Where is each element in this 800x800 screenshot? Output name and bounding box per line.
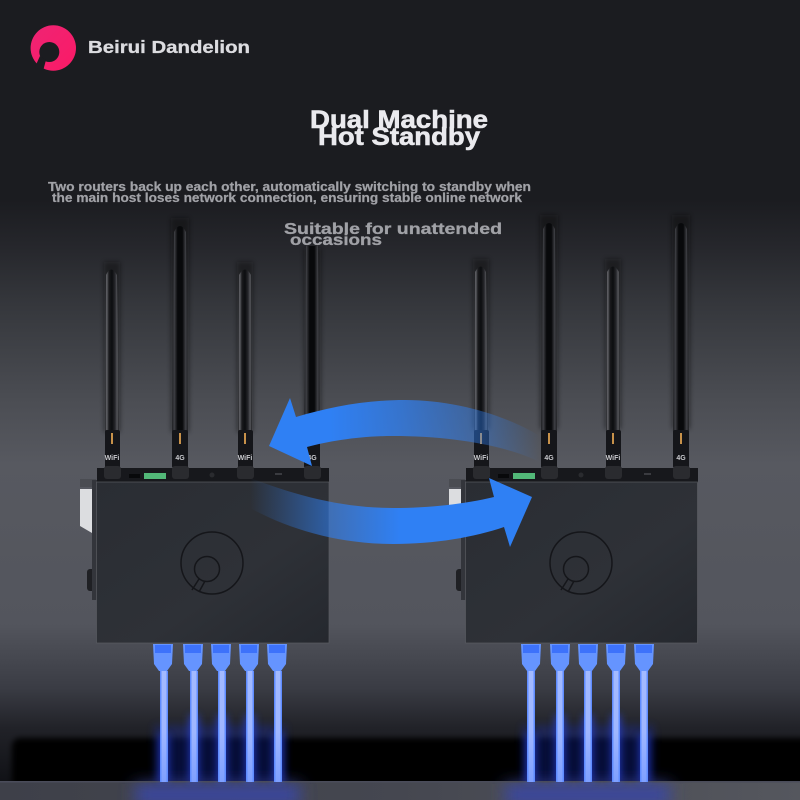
left router <box>80 218 329 782</box>
brand name: Beirui Dandelion <box>88 37 250 57</box>
right router antennas <box>474 223 689 468</box>
arrow: left router to right router <box>250 478 532 547</box>
right router antenna labels: 4G <box>544 455 554 462</box>
title <box>310 106 488 151</box>
left router bracket <box>80 479 97 600</box>
title: Hot Standby <box>318 123 480 151</box>
left router antenna labels: 4G <box>175 455 185 462</box>
left router antenna labels: WiFi <box>238 455 252 462</box>
left router antenna shadows <box>104 218 321 432</box>
description <box>48 180 531 205</box>
right router antenna labels <box>474 455 686 462</box>
floor <box>0 781 800 800</box>
left router collars <box>104 466 321 479</box>
arrow: right router to left router <box>269 398 540 466</box>
logo mark <box>31 25 76 71</box>
right router <box>449 215 698 782</box>
left router antenna labels: 4G <box>307 455 317 462</box>
description: Two routers back up each other, automatically switching to standby when <box>48 180 531 194</box>
left router antenna labels <box>105 455 317 462</box>
right router bracket <box>449 479 466 600</box>
right router antenna labels: 4G <box>676 455 686 462</box>
right router cables <box>521 644 654 782</box>
right router body <box>466 482 698 643</box>
right router embossed logo <box>550 532 612 594</box>
right router terminal <box>513 473 535 479</box>
suitability note: occasions <box>290 232 382 249</box>
right router collars <box>473 466 690 479</box>
right router port strip <box>466 468 698 483</box>
suitability note <box>284 221 502 249</box>
right router sockets <box>498 472 651 478</box>
left router terminal <box>144 473 166 479</box>
right router antenna labels: WiFi <box>606 455 620 462</box>
left router antenna labels: WiFi <box>105 455 119 462</box>
left router sockets <box>129 472 282 478</box>
left router cables <box>153 644 287 782</box>
floor shadow band <box>12 725 800 798</box>
left router body <box>96 482 329 643</box>
left router embossed logo <box>181 532 243 594</box>
right router antenna shadows <box>473 215 690 429</box>
description: the main host loses network connection, ensuring stable online network <box>52 191 522 205</box>
left router antennas <box>105 226 320 468</box>
title: Dual Machine <box>310 106 488 134</box>
suitability note: Suitable for unattended <box>284 221 502 238</box>
left router port strip <box>97 468 329 483</box>
right router antenna labels: WiFi <box>474 455 488 462</box>
